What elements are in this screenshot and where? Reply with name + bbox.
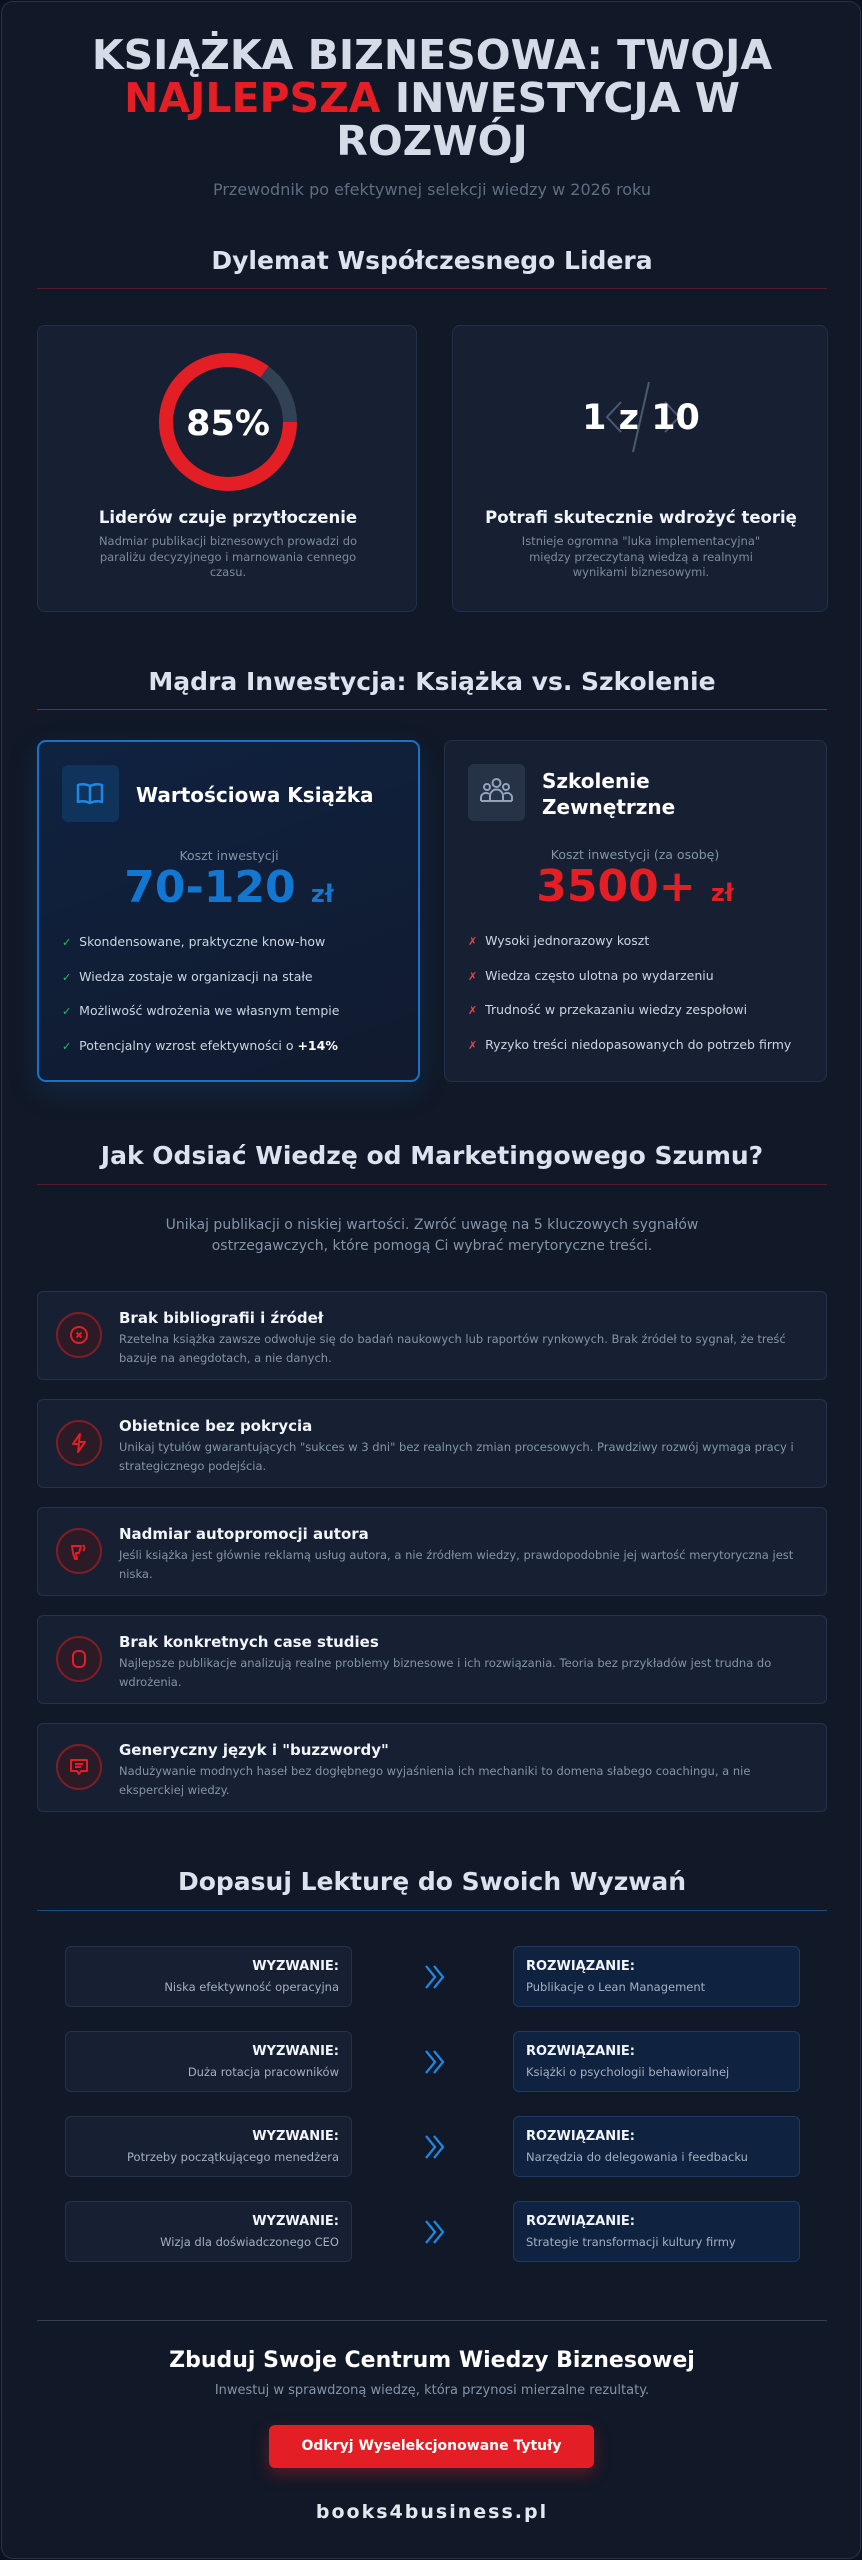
list: drawbacks: ✗ Wiedza często ulotna po wydarzeniu [468,968,714,983]
CTA subtitle: Inwestuj w sprawdzoną wiedzę, która przynosi mierzalne rezultaty. [215,2383,649,2398]
signal 4: Brak konkretnych case studies [119,1633,379,1651]
panel: 85% stat [37,325,417,612]
card title: Zewnętrzne [542,795,675,819]
price: 3500+ zł [536,861,734,912]
signal 1 [37,1291,827,1380]
heading: dilemma: Dylemat Współczesnego Lidera [211,246,653,275]
row 4: ROZWIĄZANIE: [526,2214,635,2229]
CTA button: Odkryj Wyselekcjonowane Tytuły [302,2438,561,2454]
signal 5: Nadużywanie modnych haseł bez dogłębnego wyjaśnienia ich mechaniki to domena słabego coachingu, a nie eksperckiej wiedzy. [119,1764,750,1797]
row 1: WYZWANIE: [252,1959,339,1974]
list: drawbacks: ✗ Wysoki jednorazowy koszt [468,933,649,948]
arrow [425,2135,444,2159]
row 2: ROZWIĄZANIE: [526,2044,635,2059]
price: 70-120 zł [124,862,334,913]
donut chart [159,353,297,491]
list: benefits: ✓ Skondensowane, praktyczne know-how [62,934,325,949]
panel: book [37,740,420,1082]
list: drawbacks: ✗ Trudność w przekazaniu wiedzy zespołowi [468,1002,747,1017]
row 1: Niska efektywność operacyjna [164,1980,339,1994]
row 3: WYZWANIE: [252,2129,339,2144]
signal 3: Nadmiar autopromocji autora [119,1525,369,1543]
title: KSIĄŻKA BIZNESOWA: TWOJA [92,31,772,79]
signal 3 [37,1507,827,1596]
donut chart: 85% [186,404,270,444]
icon: people [468,764,525,821]
card title: Szkolenie [542,769,650,793]
title [92,31,772,165]
icon: code brackets [606,382,678,452]
CTA heading: Zbuduj Swoje Centrum Wiedzy Biznesowej [169,2348,695,2373]
list: benefits: ✓ Potencjalny wzrost efektywności o +14% [62,1038,338,1053]
stat description: Istnieje ogromna "luka implementacyjna" między przeczytaną wiedzą a realnymi wynikami biznesowymi. [522,534,760,579]
title: NAJLEPSZA INWESTYCJA W [124,74,740,122]
icon: box [56,1636,102,1682]
row 1: ROZWIĄZANIE: [526,1959,635,1974]
list: drawbacks: ✗ Ryzyko treści niedopasowanych do potrzeb firmy [468,1037,791,1052]
icon: megaphone [56,1528,102,1574]
list: benefits: ✓ Wiedza zostaje w organizacji na stałe [62,969,313,984]
list: benefits: ✓ Możliwość wdrożenia we własnym tempie [62,1003,339,1018]
heading: match: Dopasuj Lekturę do Swoich Wyzwań [178,1867,686,1896]
row 2: Książki o psychologii behawioralnej [526,2065,729,2079]
stat description: Nadmiar publikacji biznesowych prowadzi do paraliżu decyzyjnego i marnowania cennego czasu. [99,534,357,579]
panel: training [444,740,827,1082]
stat title: Liderów czuje przytłoczenie [99,508,357,527]
heading: noise: Jak Odsiać Wiedzę od Marketingowego Szumu? [101,1141,763,1170]
row 3: Narzędzia do delegowania i feedbacku [526,2150,748,2164]
row 2: Duża rotacja pracowników [188,2065,339,2079]
arrow [425,2220,444,2244]
icon: chat [56,1744,102,1790]
row 4: WYZWANIE: [252,2214,339,2229]
stat title: Potrafi skutecznie wdrożyć teorię [485,508,797,527]
footer brand: books4business.pl [316,2501,548,2523]
cost label: Koszt inwestycji [179,848,279,863]
signal 5 [37,1723,827,1812]
CTA button [269,2425,594,2468]
row 2: WYZWANIE: [252,2044,339,2059]
heading: investment: Mądra Inwestycja: Książka vs. Szkolenie [148,667,716,696]
icon: x circle [56,1312,102,1358]
signal 4 [37,1615,827,1704]
arrow [425,1965,444,1989]
row 3: ROZWIĄZANIE: [526,2129,635,2144]
intro text: Unikaj publikacji o niskiej wartości. Zwróć uwagę na 5 kluczowych sygnałów ostrzegawczych, które pomogą Ci wybrać merytoryczne treści. [166,1217,698,1254]
stat value: 1 z 10 [582,398,700,438]
signal 3: Jeśli książka jest głównie reklamą usług autora, a nie źródłem wiedzy, prawdopodobnie jej wartość merytoryczna jest niska. [119,1548,793,1581]
card title: Wartościowa Książka [136,783,374,807]
row 4: Strategie transformacji kultury firmy [526,2235,736,2249]
signal 4: Najlepsze publikacje analizują realne problemy biznesowe i ich rozwiązania. Teoria bez przykładów jest trudna do wdrożenia. [119,1656,771,1689]
row 2 [65,2031,800,2092]
signal 1: Rzetelna książka zawsze odwołuje się do badań naukowych lub raportów rynkowych. Brak źródeł to sygnał, że treść bazuje na anegdotach, a nie danych. [119,1332,786,1365]
row 1: Publikacje o Lean Management [526,1980,705,1994]
cost label: Koszt inwestycji (za osobę) [551,847,719,862]
panel: 1 z 10 stat [452,325,828,612]
signal 2: Obietnice bez pokrycia [119,1417,312,1435]
arrow [425,2050,444,2074]
card title [542,769,675,819]
signal 1: Brak bibliografii i źródeł [119,1309,323,1327]
signal 5: Generyczny język i "buzzwordy" [119,1741,389,1759]
list: drawbacks [468,933,791,1052]
row 3 [65,2116,800,2177]
signal 2 [37,1399,827,1488]
list: benefits [62,934,339,1053]
title: ROZWÓJ [336,117,528,165]
row 4 [65,2201,800,2262]
icon: lightning [56,1420,102,1466]
row 4: Wizja dla doświadczonego CEO [160,2235,339,2249]
signal 2: Unikaj tytułów gwarantujących "sukces w 3 dni" bez realnych zmian procesowych. Prawdziwy rozwój wymaga pracy i strategicznego podejścia. [119,1440,794,1473]
icon: book [62,765,119,822]
row 3: Potrzeby początkującego menedżera [127,2150,339,2164]
row 1 [65,1946,800,2007]
subtitle: Przewodnik po efektywnej selekcji wiedzy w 2026 roku [213,180,651,199]
